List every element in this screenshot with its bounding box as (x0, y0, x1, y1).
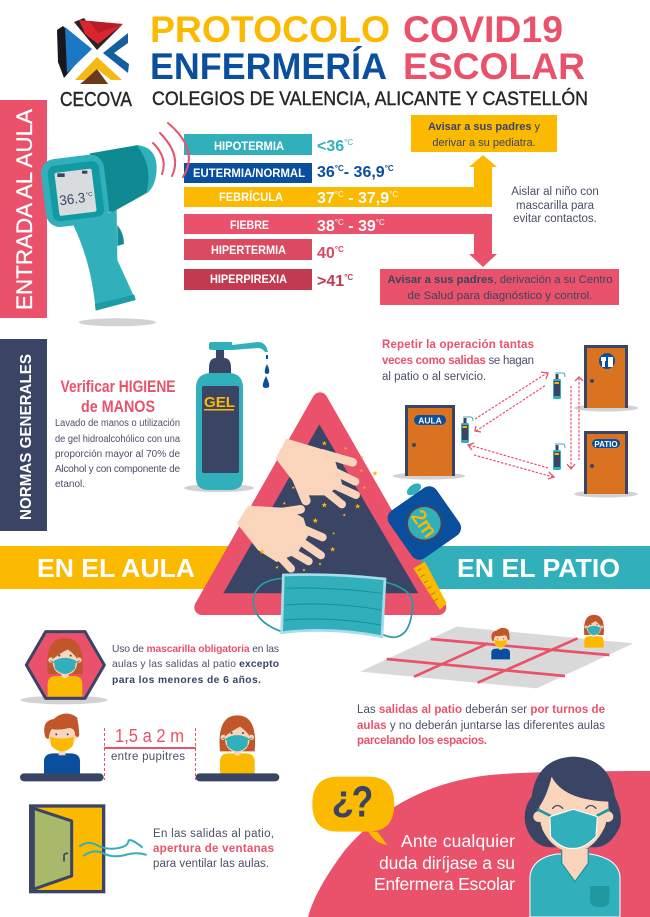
heading: verificar higiene: de MANOS (81, 398, 155, 416)
callout: avisar pediatra: Avisar a sus padres y (428, 121, 541, 133)
text: ante cualquier duda: Ante cualquier (401, 831, 515, 851)
temperature values: 37 (317, 190, 335, 207)
band: en el aula: EN EL AULA (37, 553, 195, 583)
door: aula (393, 405, 465, 480)
temperature values: 36 (317, 164, 335, 181)
text: uso de mascarilla: Uso de mascarilla obligatoria en las (112, 644, 279, 655)
logo: CECOVA (57, 18, 129, 84)
icon: question speech bubble: ? (352, 779, 373, 827)
icons: small gel bottles (461, 373, 565, 470)
temperature values: 40 (317, 245, 335, 262)
text: aislar al niño: Aislar al niño con (511, 186, 599, 198)
icon: question speech bubble (312, 777, 394, 845)
callout: avisar pediatra (411, 115, 557, 152)
icon: open window with breeze (31, 806, 147, 892)
illustration: warning triangle with hands, tape and mask (202, 400, 465, 637)
icon: infrared thermometer (39, 145, 157, 326)
door: patio: PATIO (594, 440, 618, 449)
icon: gel bottle (184, 342, 269, 492)
text: aislar al niño: evitar contactos. (513, 213, 597, 225)
text: apertura de ventanas (153, 828, 274, 870)
door: aula: AULA (418, 416, 442, 426)
callout: centro de salud (380, 269, 619, 305)
logo name: CECOVA (60, 89, 133, 111)
text: apertura de ventanas: para ventilar las aulas. (153, 858, 269, 870)
heading: verificar higiene (60, 378, 176, 416)
temperature scale table (184, 134, 312, 290)
text: apertura de ventanas: En las salidas al patio, (153, 828, 274, 840)
title: ENFERMERÍA (150, 46, 387, 87)
text: salidas al patio: aulas y no deberán juntarse las diferentes aulas (357, 720, 605, 732)
text: aislar al niño: mascarilla para (516, 200, 595, 212)
text: repetir la operación: Repetir la operación tantas (382, 339, 534, 351)
text: lavado de manos: Lavado de manos o utilización (55, 418, 180, 429)
text: uso de mascarilla: para los menores de 6 años. (112, 675, 261, 686)
temperature values: - 36,9 (344, 164, 385, 181)
heading: verificar higiene: Verificar HIGIENE (60, 378, 176, 396)
icon: question speech bubble: ¿ (332, 778, 354, 819)
temperature scale table: HIPERTERMIA (211, 245, 286, 257)
icon: gel bottle: GEL (204, 394, 235, 411)
icon: hexagon child with mask (21, 632, 107, 704)
tape measure (384, 481, 465, 610)
arrow: red down (312, 214, 497, 267)
text: ante cualquier duda: Enfermera Escolar (374, 874, 515, 894)
text: salidas al patio (357, 704, 605, 747)
text: repetir la operación: al patio o al servicio. (382, 371, 486, 383)
temperature values: °C (344, 138, 353, 147)
tape measure: 2m (407, 506, 440, 542)
title (150, 9, 585, 87)
arrows: dashed routes (468, 372, 583, 479)
text: uso de mascarilla (112, 644, 279, 686)
callout: centro de salud: de Salud para diagnóstico y control. (408, 290, 592, 302)
text: ante cualquier duda (374, 831, 515, 894)
band: en el patio (410, 546, 650, 589)
temperature values: °C (344, 273, 353, 282)
illustration: parcelled playground (360, 615, 633, 688)
panel: normas generales side banner: NORMAS GENERALES (18, 354, 35, 520)
title: COVID19 (403, 9, 563, 50)
band: en el patio: EN EL PATIO (457, 553, 620, 583)
text: lavado de manos: etanol. (55, 479, 85, 490)
panel: normas generales side banner (0, 339, 47, 531)
face mask (253, 575, 413, 637)
temperature values: °C (385, 164, 394, 173)
door: patio (574, 431, 638, 498)
temperature values (317, 138, 398, 290)
door: servicio (574, 345, 638, 412)
temperature values: 38 (317, 218, 335, 235)
callout: centro de salud: Avisar a sus padres, derivación a su Centro (388, 274, 612, 286)
temperature values: °C (389, 190, 398, 199)
icon: infrared signal waves (153, 123, 189, 177)
temperature values: >41 (317, 273, 344, 290)
callout: avisar pediatra: derivar a su pediatra. (432, 137, 536, 149)
temperature values: °C (376, 218, 385, 227)
panel: nurse contact background (308, 771, 650, 917)
text: uso de mascarilla: aulas y las salidas al patio excepto (112, 659, 279, 670)
text: apertura de ventanas: apertura de ventanas (153, 843, 274, 855)
temperature scale table: FIEBRE (230, 220, 269, 232)
title: PROTOCOLO (150, 9, 390, 50)
temperature scale table: FEBRÍCULA (219, 191, 283, 204)
title: ESCOLAR (403, 46, 585, 87)
panel: entrada al aula side banner (0, 100, 47, 318)
illustration: school nurse (525, 757, 621, 917)
text: repetir la operación (382, 339, 534, 383)
temperature values: - 39 (344, 218, 376, 235)
band: en el aula (0, 546, 240, 589)
text: salidas al patio: Las salidas al patio deberán ser por turnos de (357, 704, 605, 716)
text: aislar al niño (511, 186, 599, 225)
temperature values: °C (335, 164, 344, 173)
panel: entrada al aula side banner: ENTRADA AL AULA (12, 109, 37, 310)
icon: infrared thermometer: 36.3 (58, 189, 86, 208)
text: salidas al patio: parcelando los espacios. (357, 735, 487, 747)
arrow: yellow up (312, 155, 497, 207)
subtitle: COLEGIOS DE VALENCIA, ALICANTE Y CASTELLÓN (152, 87, 588, 110)
temperature values: <36 (317, 138, 344, 155)
diagram: distance between desks (20, 714, 279, 781)
temperature scale table: EUTERMIA/NORMAL (193, 168, 305, 180)
text: repetir la operación: veces como salidas se hagan (382, 355, 534, 367)
diagram: distance between desks: entre pupitres (111, 751, 185, 763)
diagram: distance between desks: 1,5 a 2 m (115, 726, 184, 746)
temperature values: - 37,9 (344, 190, 389, 207)
text: ante cualquier duda: duda diríjase a su (379, 853, 515, 873)
text: lavado de manos (55, 418, 180, 490)
text: lavado de manos: Alcohol y con componente de (55, 464, 180, 475)
temperature values: °C (335, 245, 344, 254)
text: lavado de manos: proporción mayor al 70% de (55, 449, 180, 460)
hand: upper (276, 439, 356, 504)
temperature values: °C (335, 218, 344, 227)
temperature scale table: HIPOTERMIA (214, 141, 284, 153)
icon: infrared thermometer: °C (86, 192, 94, 199)
sparkles (259, 441, 378, 582)
hand: lower (237, 506, 323, 569)
temperature scale table: HIPERPIREXIA (210, 274, 287, 286)
temperature values: °C (335, 190, 344, 199)
text: lavado de manos: de gel hidroalcohólico con una (55, 434, 180, 445)
